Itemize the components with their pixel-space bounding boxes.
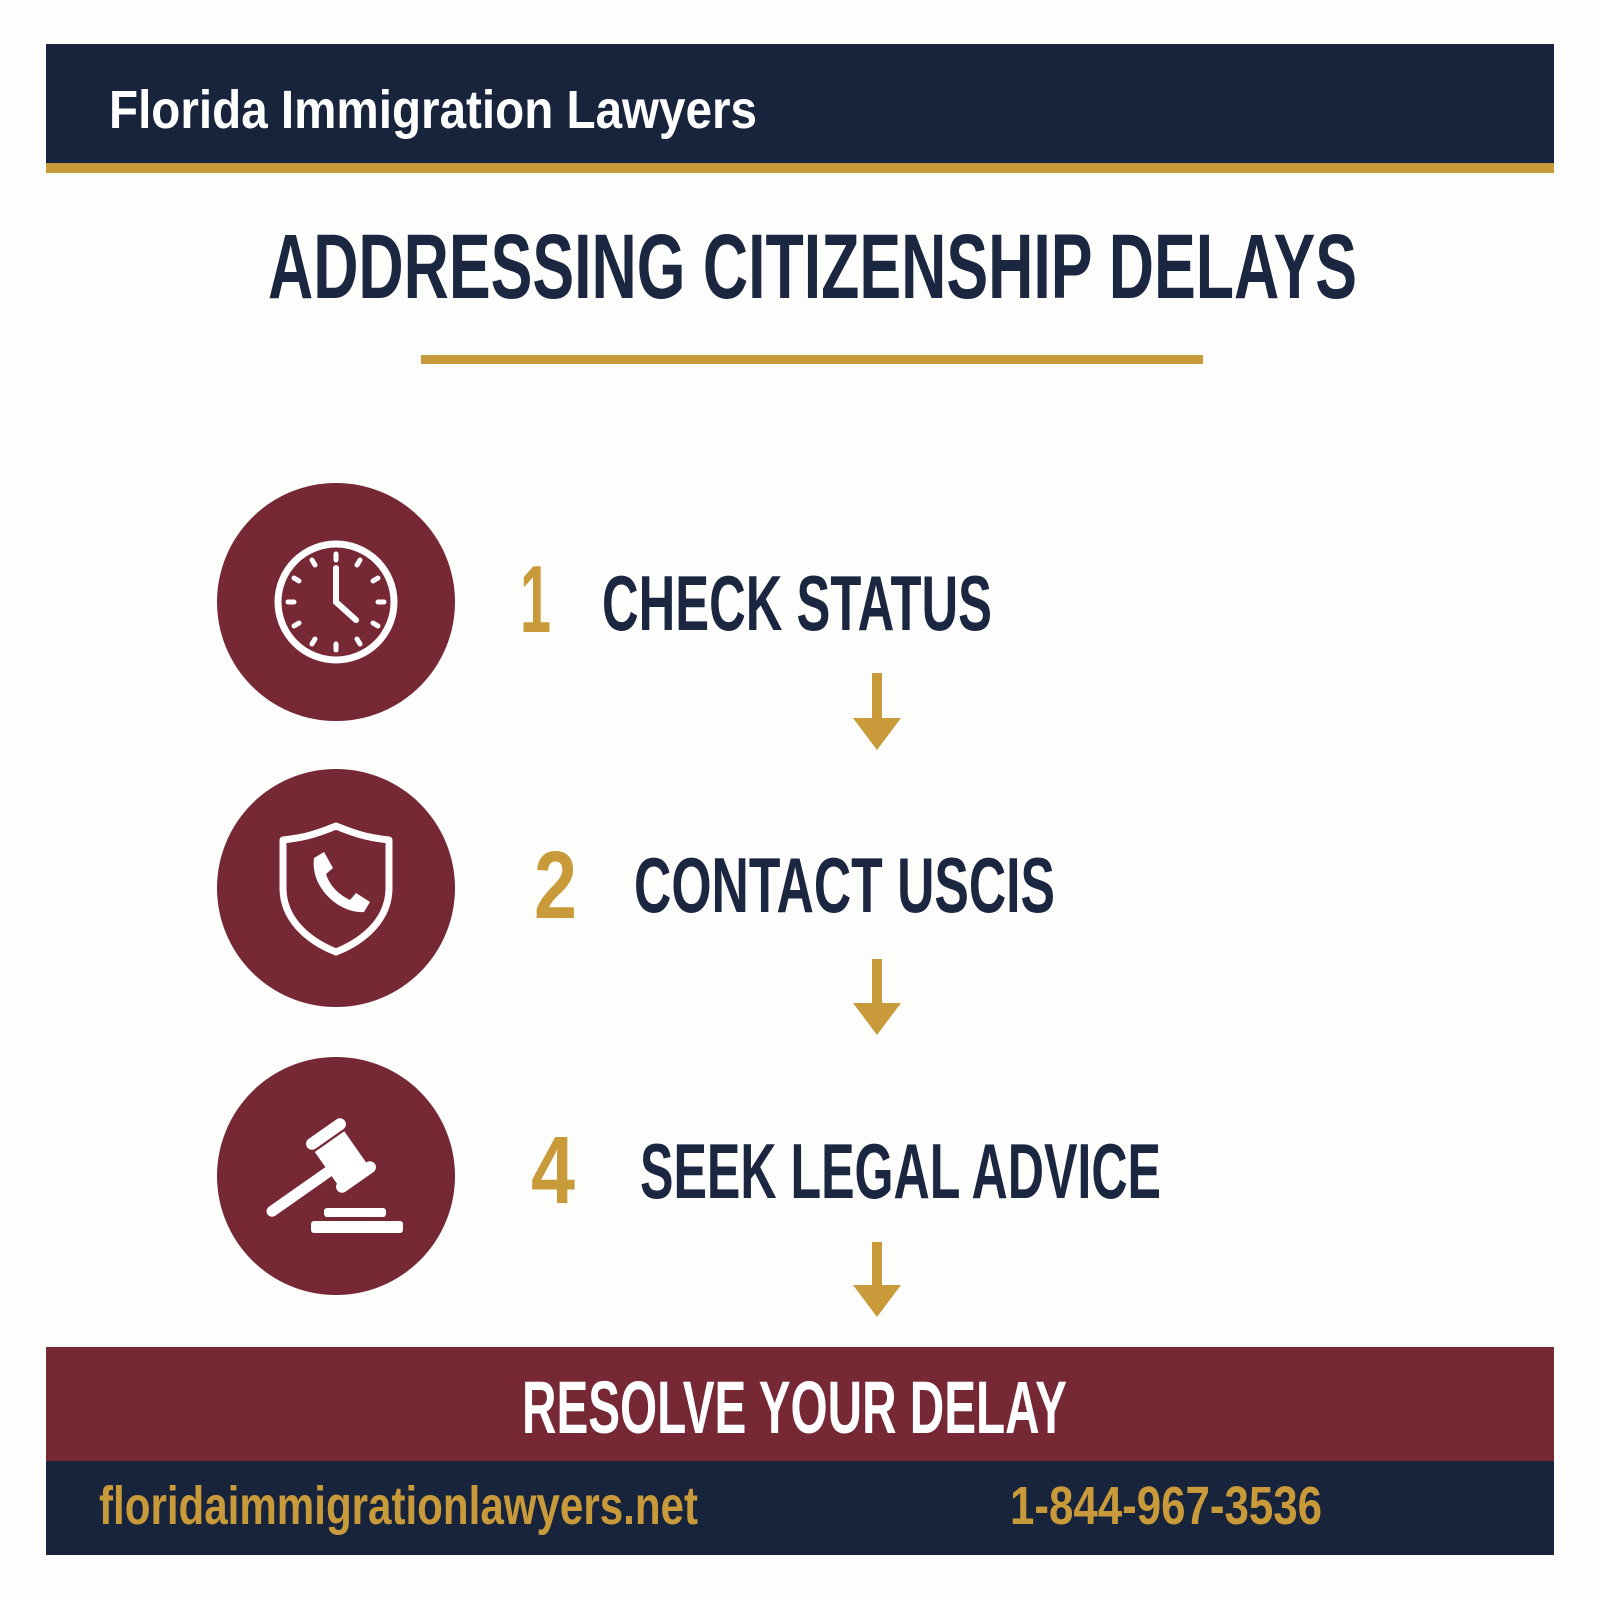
header text: Florida Immigration Lawyers bbox=[109, 80, 757, 140]
title underline bbox=[421, 355, 1203, 364]
step 1 bbox=[217, 483, 992, 721]
phone: 1-844-967-3536 bbox=[1010, 1476, 1322, 1536]
step 4 bbox=[217, 1057, 1161, 1295]
number 2: 2 bbox=[534, 832, 577, 939]
arrow 1 bbox=[853, 673, 901, 750]
footer bbox=[46, 1461, 1554, 1555]
arrow 2 bbox=[853, 959, 901, 1035]
icon: shield phone bbox=[217, 769, 455, 1007]
number 1: 1 bbox=[520, 546, 551, 653]
label: check status: CHECK STATUS bbox=[602, 559, 992, 647]
step 2 bbox=[217, 769, 1055, 1007]
result banner bbox=[46, 1347, 1554, 1462]
website: floridaimmigrationlawyers.net bbox=[99, 1476, 698, 1536]
label: seek legal advice: SEEK LEGAL ADVICE bbox=[640, 1127, 1161, 1215]
icon: clock bbox=[217, 483, 455, 721]
arrow 3 bbox=[853, 1242, 901, 1317]
number 4: 4 bbox=[531, 1117, 575, 1224]
icon: gavel bbox=[217, 1057, 455, 1295]
banner text: RESOLVE YOUR DELAY bbox=[522, 1366, 1067, 1449]
label: contact uscis: CONTACT USCIS bbox=[634, 841, 1055, 929]
header bar bbox=[46, 44, 1554, 173]
